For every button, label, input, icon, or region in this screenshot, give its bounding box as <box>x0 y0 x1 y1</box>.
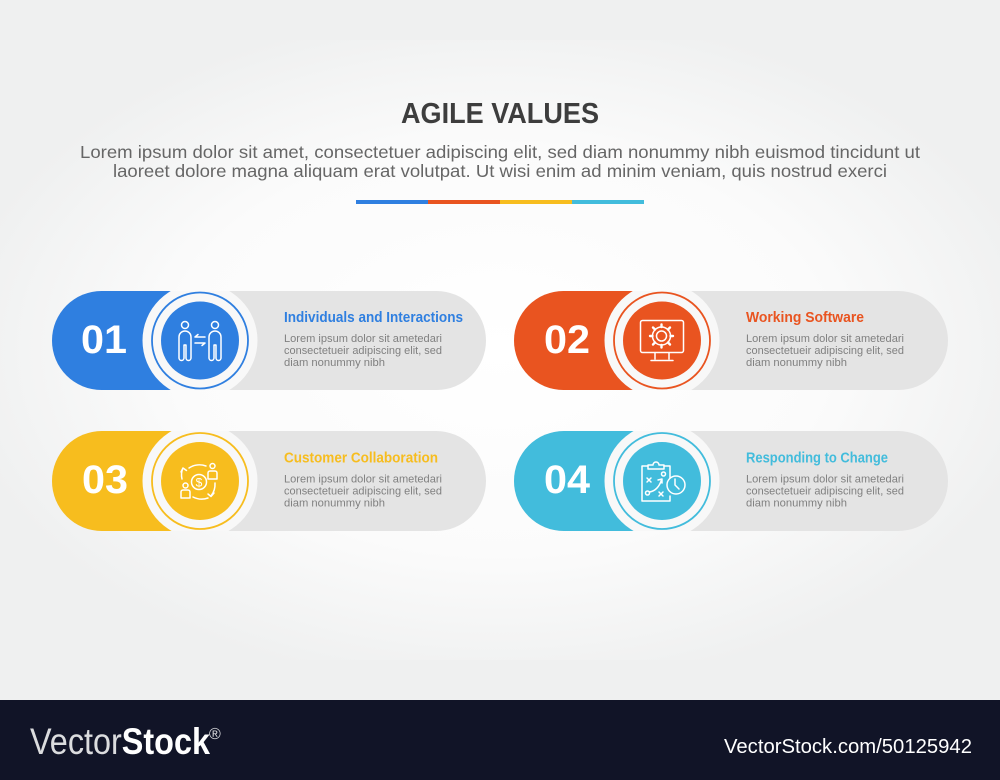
body text: consectetueir adipiscing elit, sed <box>284 486 442 498</box>
panel: 01 Individuals and Interactions <box>52 291 486 390</box>
icon: monitor with gear <box>640 320 684 360</box>
panel: 03 Customer Collaboration <box>52 431 486 531</box>
number 01: 01 <box>81 318 127 362</box>
heading: Responding to Change <box>746 450 888 466</box>
body text: consectetueir adipiscing elit, sed <box>746 486 904 498</box>
body text: diam nonummy nibh <box>746 498 847 510</box>
colour divider <box>356 200 644 204</box>
intro text <box>80 142 920 181</box>
body text: Lorem ipsum dolor sit ametedari <box>746 333 904 345</box>
number 04: 04 <box>544 458 591 502</box>
body text: Lorem ipsum dolor sit ametedari <box>284 333 442 345</box>
body text: consectetueir adipiscing elit, sed <box>284 345 442 357</box>
body text: diam nonummy nibh <box>746 357 847 369</box>
body text: consectetueir adipiscing elit, sed <box>746 345 904 357</box>
heading: Working Software <box>746 310 864 326</box>
footer logo: VectorStock <box>30 721 210 762</box>
body text <box>284 474 442 510</box>
panel: 02 Working Software <box>514 291 948 390</box>
footer url: VectorStock.com/50125942 <box>724 736 972 758</box>
icon: customers and money cycle: $ <box>196 476 203 490</box>
icon: clipboard plan and clock <box>642 462 685 501</box>
number 02: 02 <box>544 318 590 362</box>
icon: people exchanging <box>179 322 221 360</box>
body text: diam nonummy nibh <box>284 357 385 369</box>
footer bar <box>0 700 1000 780</box>
body text <box>746 333 904 369</box>
body text: diam nonummy nibh <box>284 498 385 510</box>
intro text: Lorem ipsum dolor sit amet, consectetuer adipiscing elit, sed diam nonummy nibh euismod tincidunt ut <box>80 142 920 162</box>
title: AGILE VALUES <box>401 98 599 130</box>
number 03: 03 <box>82 458 128 502</box>
body text: Lorem ipsum dolor sit ametedari <box>746 474 904 486</box>
registered mark: ® <box>209 726 221 743</box>
heading: Customer Collaboration <box>284 450 438 466</box>
body text <box>746 474 904 510</box>
body text <box>284 333 442 369</box>
icon: customers and money cycle <box>181 464 217 499</box>
body text: Lorem ipsum dolor sit ametedari <box>284 474 442 486</box>
intro text: laoreet dolore magna aliquam erat volutpat. Ut wisi enim ad minim veniam, quis nostrud exerci <box>113 161 887 181</box>
panel: 04 Responding to Change <box>514 431 948 531</box>
heading: Individuals and Interactions <box>284 310 463 326</box>
